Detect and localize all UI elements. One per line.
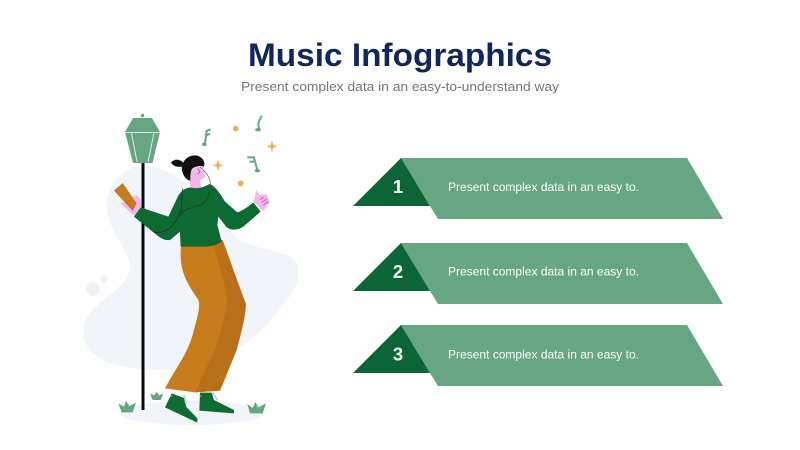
wire to ear — [203, 170, 210, 190]
lamp post — [125, 114, 160, 410]
title: Music Infographics — [248, 37, 552, 73]
trousers — [165, 240, 246, 392]
number 3: 3 — [393, 344, 403, 364]
shoes — [165, 393, 234, 423]
head — [171, 155, 206, 192]
book and left hand — [114, 183, 142, 216]
music notes, sparkles and dots — [202, 116, 277, 186]
banner 2 — [353, 243, 723, 304]
banner 1 — [353, 158, 723, 219]
grass tufts — [118, 392, 266, 413]
banner 3 — [353, 325, 723, 386]
number 1: 1 — [393, 176, 403, 197]
right hand — [254, 190, 270, 211]
decorative bubbles — [86, 276, 108, 296]
text 3: Present complex data in an easy to. — [448, 348, 639, 362]
text 1: Present complex data in an easy to. — [448, 180, 639, 194]
sweater — [134, 184, 261, 247]
ground shadow — [120, 401, 264, 425]
background blob — [83, 165, 299, 370]
subtitle: Present complex data in an easy-to-understand way — [241, 79, 560, 94]
text 2: Present complex data in an easy to. — [448, 264, 639, 278]
number 2: 2 — [393, 261, 403, 282]
illustration: person singing at a lamp post — [83, 114, 299, 425]
earphone wire — [153, 188, 209, 232]
